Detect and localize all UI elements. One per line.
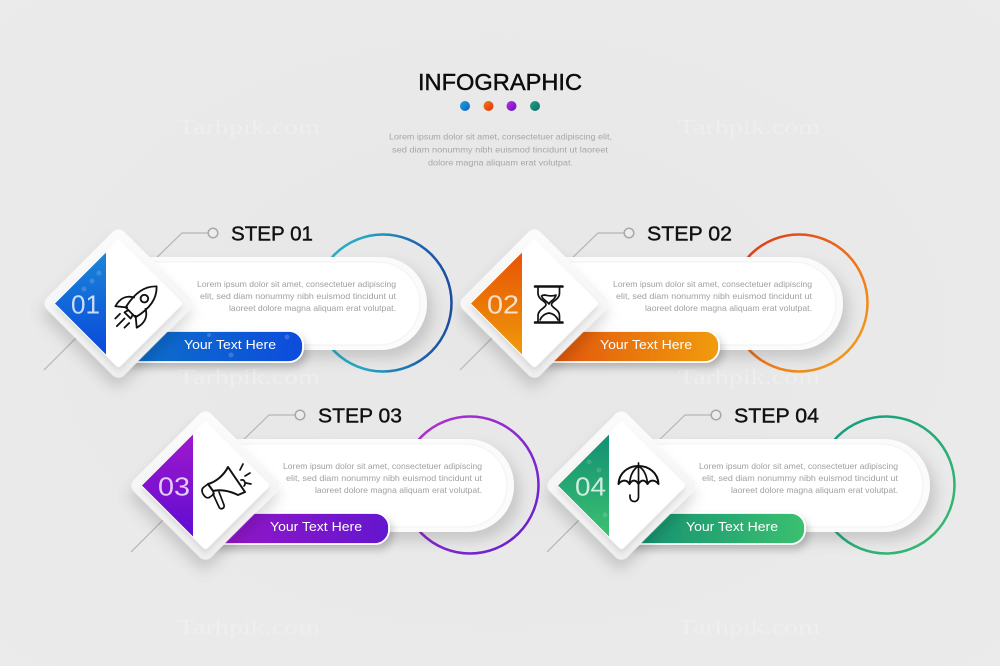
icon: umbrella [618, 463, 658, 502]
body text: step 04: elit, sed diam nonummy nibh euismod tincidunt ut [702, 473, 899, 483]
body text: step 02: elit, sed diam nonummy nibh euismod tincidunt ut [616, 291, 813, 301]
heading: step 01: STEP 01 [231, 222, 313, 246]
body text: step 01: elit, sed diam nonummy nibh euismod tincidunt ut [200, 291, 397, 301]
watermark: Tarhpik.com [178, 115, 320, 139]
body text: step 02 [613, 279, 813, 313]
diamond badge: step 01: 01 [71, 290, 100, 320]
body text: step 02: laoreet dolore magna aliquam erat volutpat. [645, 303, 812, 313]
button: step 03 [195, 513, 389, 544]
button: step 04 [611, 513, 805, 544]
diamond badge: step 03: 03 [158, 472, 190, 502]
ring: step 01 [314, 234, 452, 372]
diamond badge: step 03 [128, 408, 283, 563]
watermark: Tarhpik.com [178, 365, 320, 389]
button: step 02: Your Text Here [600, 337, 692, 352]
panel: step 04 [544, 404, 954, 563]
watermark: Tarhpik.com [178, 615, 320, 639]
body text: step 04: Lorem ipsum dolor sit amet, consectetuer adipiscing [699, 461, 898, 471]
heading: step 02: STEP 02 [647, 222, 732, 246]
icon: hourglass [535, 286, 562, 322]
panel: step 01 [41, 222, 451, 381]
text pill: step 01 [95, 257, 427, 350]
button: step 02 [524, 331, 719, 362]
intro text block: Lorem ipsum dolor sit amet, consectetuer adipiscing elit, [389, 132, 612, 142]
watermark [178, 115, 820, 639]
ring: step 04 [818, 416, 954, 554]
ring: step 03 [402, 416, 538, 554]
button: step 01 [108, 331, 303, 362]
intro text block [389, 132, 612, 168]
body text: step 03: Lorem ipsum dolor sit amet, consectetuer adipiscing [283, 461, 482, 471]
button: step 03: Your Text Here [270, 519, 362, 534]
text pill: step 03 [182, 439, 514, 532]
body text: step 03: elit, sed diam nonummy nibh euismod tincidunt ut [286, 473, 483, 483]
intro text block: sed diam nonummy nibh euismod tincidunt ut laoreet [392, 144, 609, 154]
watermark: Tarhpik.com [678, 365, 820, 389]
body text: step 01: laoreet dolore magna aliquam erat volutpat. [229, 303, 396, 313]
body text: step 01 [197, 279, 397, 313]
diamond badge: step 02 [457, 226, 612, 381]
icon: megaphone [202, 464, 251, 509]
icon: rocket [106, 275, 168, 337]
button: step 01: Your Text Here [184, 337, 276, 352]
title colour dots [460, 101, 540, 111]
diamond badge: step 02: 02 [487, 290, 519, 320]
panel: step 03 [128, 404, 538, 563]
text pill: step 04 [598, 439, 930, 532]
body text: step 03: laoreet dolore magna aliquam erat volutpat. [315, 485, 482, 495]
body text: step 02: Lorem ipsum dolor sit amet, consectetuer adipiscing [613, 279, 812, 289]
title: INFOGRAPHIC [418, 69, 582, 95]
button: step 04: Your Text Here [686, 519, 778, 534]
intro text block: dolore magna aliquam erat volutpat. [428, 158, 573, 168]
watermark: Tarhpik.com [678, 115, 820, 139]
body text: step 04: laoreet dolore magna aliquam erat volutpat. [731, 485, 898, 495]
body text: step 04 [699, 461, 899, 495]
diamond badge: step 01 [41, 226, 196, 381]
text pill: step 02 [511, 257, 843, 350]
heading: step 04: STEP 04 [734, 404, 819, 428]
panel: step 02 [457, 222, 868, 381]
diamond badge: step 04: 04 [575, 472, 606, 502]
body text: step 03 [283, 461, 483, 495]
body text: step 01: Lorem ipsum dolor sit amet, consectetuer adipiscing [197, 279, 396, 289]
ring: step 02 [730, 234, 868, 372]
watermark: Tarhpik.com [678, 615, 820, 639]
heading: step 03: STEP 03 [318, 404, 402, 428]
diamond badge: step 04 [544, 408, 699, 563]
